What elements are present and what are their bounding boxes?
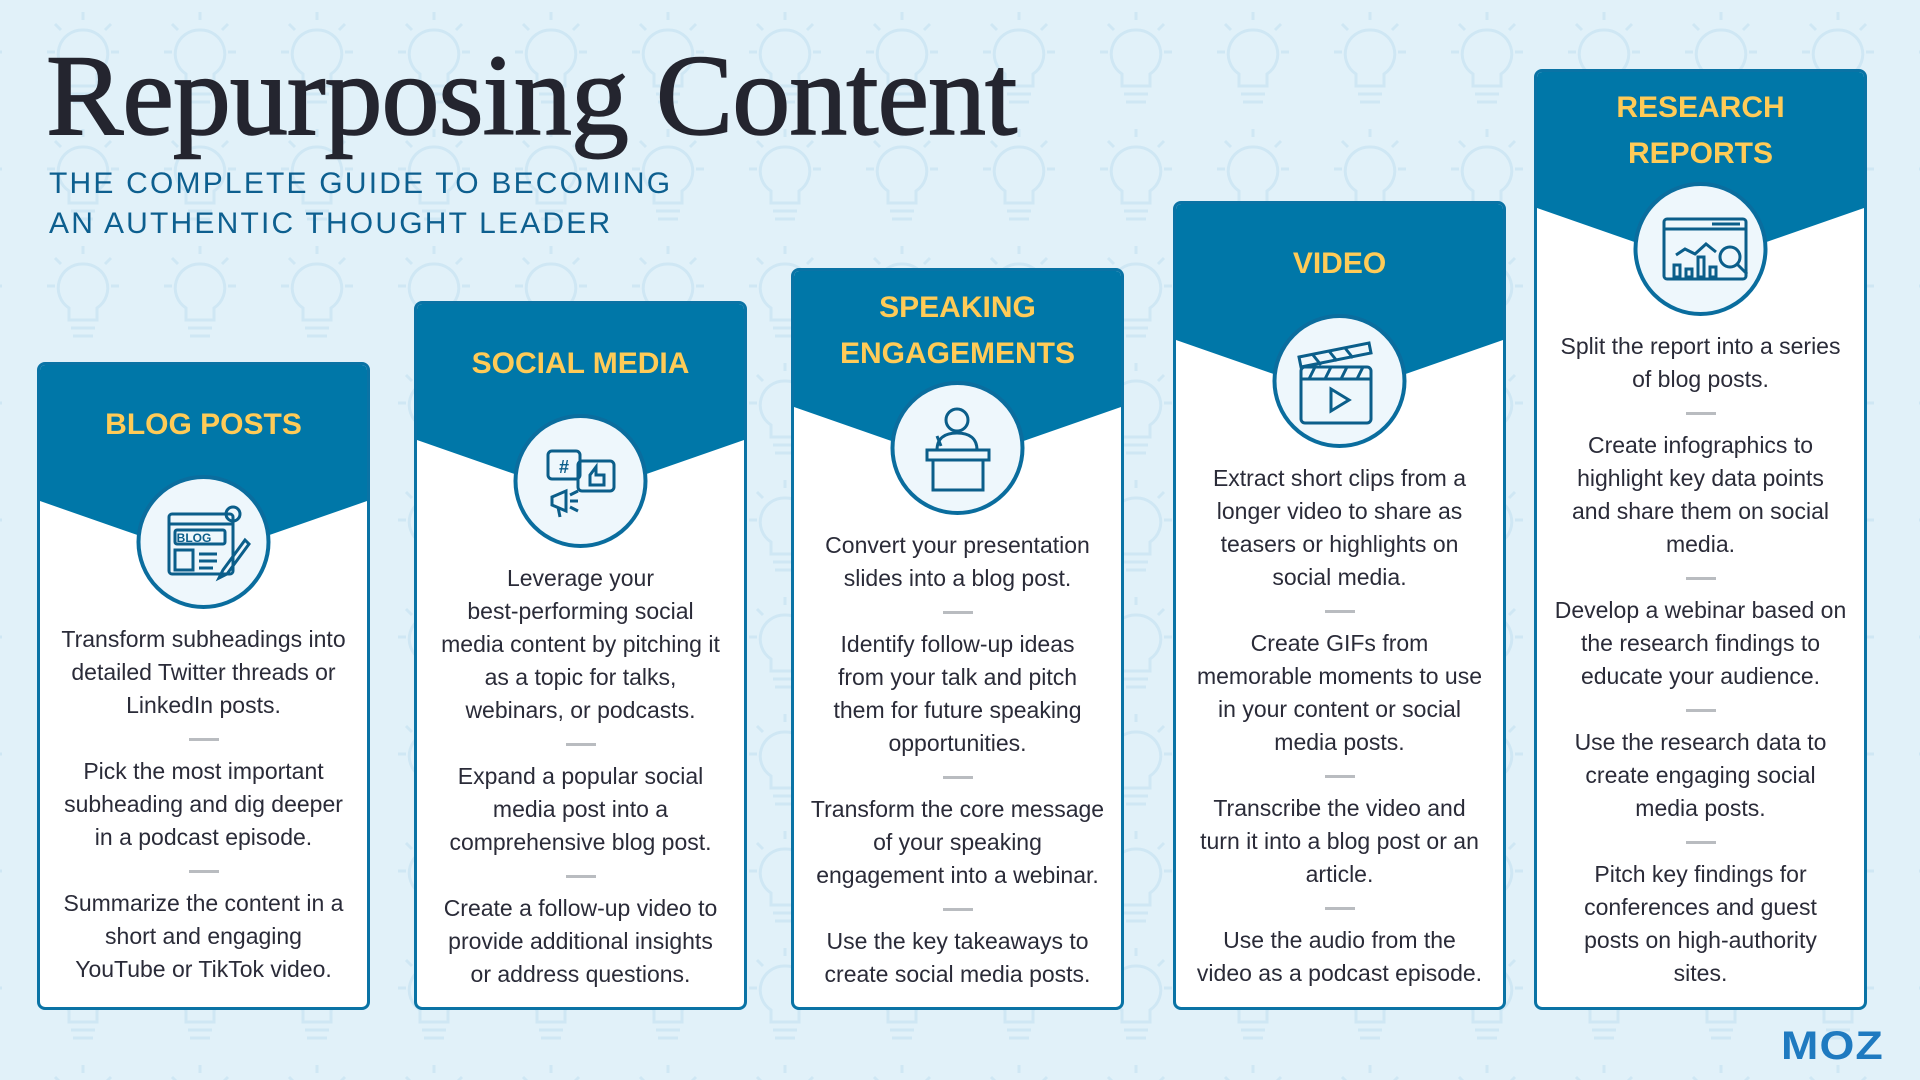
heading: RESEARCH (1616, 91, 1785, 124)
subtitle (49, 167, 672, 240)
text block: social media. Create GIFs from (1251, 564, 1428, 656)
text block: article. Use the audio from the (1223, 861, 1456, 953)
text block: create engaging social (1585, 762, 1816, 788)
text block: engagement into a webinar. Use the key takeaways to (816, 862, 1099, 954)
text block: turn it into a blog post or an (1200, 828, 1479, 854)
text block: webinars, or podcasts. Expand a popular social (458, 697, 703, 789)
text block: from your talk and pitch (838, 664, 1077, 690)
text block: slides into a blog post. Identify follow-up ideas (841, 565, 1074, 657)
heading (840, 291, 1075, 370)
text block: short and engaging (105, 923, 302, 949)
text block: memorable moments to use (1197, 663, 1482, 689)
heading: SOCIAL MEDIA (472, 347, 689, 380)
text block: media posts. Transcribe the video and (1213, 729, 1466, 821)
text block: create social media posts. (825, 961, 1090, 987)
text block: media posts. Pitch key findings for (1594, 795, 1807, 887)
text block: the research findings to (1581, 630, 1820, 656)
panel: social media (414, 301, 747, 1010)
text block: media. Develop a webinar based on (1555, 531, 1846, 623)
text block: Transform subheadings into (61, 626, 346, 652)
text block: provide additional insights (448, 928, 713, 954)
text block: Leverage your (507, 565, 654, 591)
text block (441, 565, 720, 987)
title: Repurposing Content (46, 32, 1016, 160)
heading: ENGAGEMENTS (840, 337, 1075, 370)
text block: opportunities. Transform the core message (811, 730, 1104, 822)
text block: longer video to share as (1217, 498, 1462, 524)
text block: of your speaking (873, 829, 1042, 855)
heading: REPORTS (1628, 137, 1773, 170)
text block: sites. (1674, 960, 1727, 986)
text block: and share them on social (1572, 498, 1829, 524)
text block (61, 626, 346, 982)
text block: them for future speaking (833, 697, 1082, 723)
text block: Convert your presentation (825, 532, 1090, 558)
panel: video (1173, 201, 1506, 1010)
logo: moz: MOZ (1781, 1024, 1884, 1068)
text block: in a podcast episode. Summarize the content in a (64, 824, 343, 916)
text block: Split the report into a series (1560, 333, 1840, 359)
text block: educate your audience. Use the research data to (1575, 663, 1826, 755)
text block: in your content or social (1218, 696, 1461, 722)
text block: media content by pitching it (441, 631, 720, 657)
text block (1197, 465, 1482, 986)
text block (1555, 333, 1846, 986)
text block (811, 532, 1104, 987)
heading (1616, 91, 1785, 170)
heading: BLOG POSTS (105, 408, 302, 441)
text block: media post into a (493, 796, 668, 822)
panel: social media: # (559, 457, 569, 477)
panel: research reports (1534, 69, 1867, 1010)
text block: comprehensive blog post. Create a follow-up video to (444, 829, 717, 921)
text block: posts on high-authority (1584, 927, 1817, 953)
panel: blog posts: BLOG (177, 531, 211, 545)
text block: of blog posts. Create infographics to (1588, 366, 1813, 458)
text block: detailed Twitter threads or (71, 659, 336, 685)
text block: LinkedIn posts. Pick the most important (83, 692, 324, 784)
panel: blog posts (37, 362, 370, 1010)
text block: Extract short clips from a (1213, 465, 1466, 491)
heading: SPEAKING (879, 291, 1036, 324)
panel: speaking engagements (791, 268, 1124, 1010)
text block: teasers or highlights on (1221, 531, 1458, 557)
text block: highlight key data points (1577, 465, 1824, 491)
text block: best-performing social (467, 598, 694, 624)
text block: video as a podcast episode. (1197, 960, 1482, 986)
text block: or address questions. (471, 961, 690, 987)
text block: subheading and dig deeper (64, 791, 343, 817)
subtitle: AN AUTHENTIC THOUGHT LEADER (49, 207, 612, 240)
text block: conferences and guest (1584, 894, 1817, 920)
subtitle: THE COMPLETE GUIDE TO BECOMING (49, 167, 672, 200)
text block: as a topic for talks, (485, 664, 676, 690)
heading: VIDEO (1293, 247, 1386, 280)
text block: YouTube or TikTok video. (75, 956, 332, 982)
